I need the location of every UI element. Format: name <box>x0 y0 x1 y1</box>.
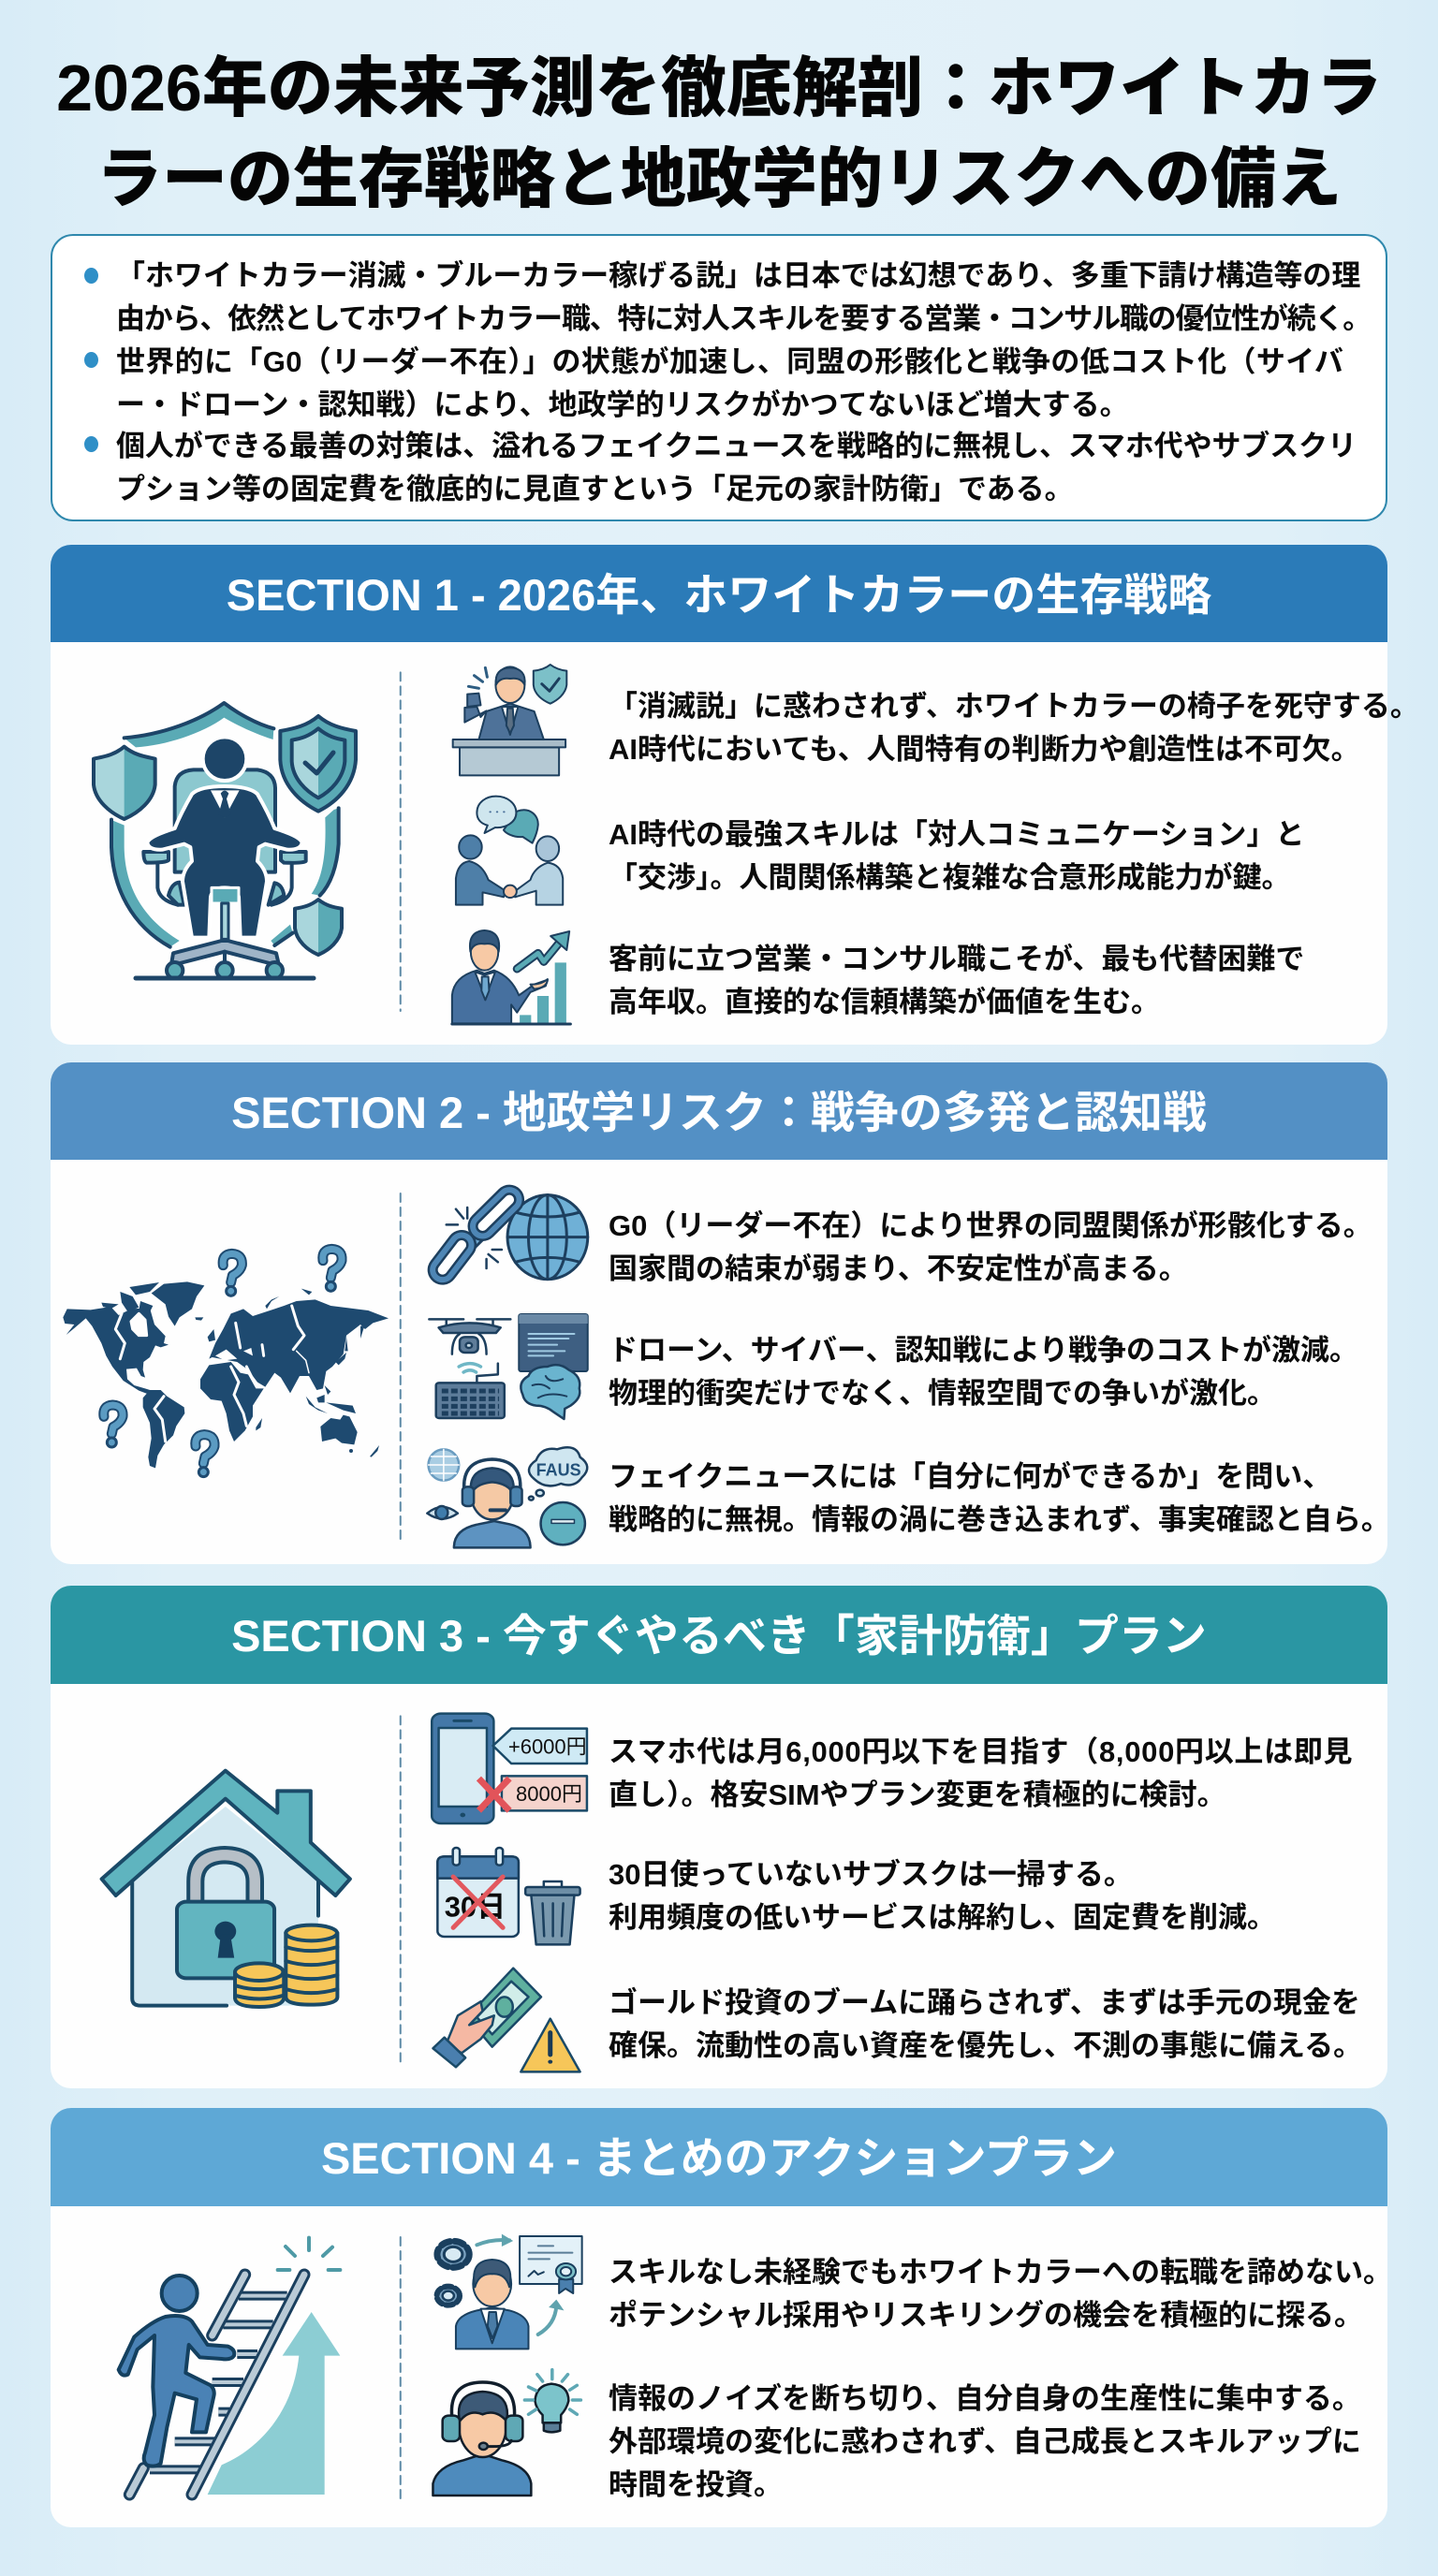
section 3 illustrations <box>99 1712 588 2073</box>
ladder <box>129 2275 304 2495</box>
section 2 text: G0: G0（リーダー不在）により世界の同盟関係が形骸化する。 <box>609 1209 1372 1242</box>
world map with question marks <box>63 1243 389 1479</box>
section 1 header <box>51 545 1387 642</box>
section 1 text: sales <box>609 943 1304 1018</box>
summary text 3: プション等の固定費を徹底的に見直すという「足元の家計防衛」である。 <box>116 473 1074 505</box>
icon: hand holding cash with warning sign <box>433 1969 580 2071</box>
question mark 3 <box>104 1405 123 1447</box>
icon: brain <box>521 1365 580 1419</box>
section 2 text: low cost war: 物理的衝突だけでなく、情報空間での争いが激化。 <box>609 1377 1276 1410</box>
section 1 text: skills: AI時代の最強スキルは「対人コミュニケーション」と <box>609 818 1304 851</box>
section 4 text: focus: 外部環境の変化に惑わされず、自己成長とスキルアップに <box>609 2425 1361 2458</box>
icon: house with padlock and coins <box>102 1771 350 2007</box>
section 3 text: smartphone: スマホ代は月6,000円以下を目指す（8,000円以上は即見 <box>609 1735 1353 1768</box>
icon: handshake with speech bubbles <box>456 797 563 905</box>
icon: smartphone with price tags <box>432 1714 587 1823</box>
summary text 1: 「ホワイトカラー消滅・ブルーカラー稼げる説」は日本では幻想であり、多重下請け構造等の理 <box>116 259 1360 292</box>
panel: section 1 <box>51 545 1387 1045</box>
section 3 text: subscriptions <box>609 1858 1276 1934</box>
summary text 2: 世界的に「G0（リーダー不在）」の状態が加速し、同盟の形骸化と戦争の低コスト化（サイバ <box>116 345 1343 378</box>
icon: calendar crossed out with trash can <box>437 1848 580 1944</box>
bullet 1 <box>84 268 98 284</box>
question mark 2 <box>323 1249 342 1291</box>
summary text 2: ー・ドローン・認知戦）により、地政学的リスクがかつてないほど増大する。 <box>116 388 1129 421</box>
section 4 text: career change: ポテンシャル採用やリスキリングの機会を積極的に探る。 <box>609 2299 1363 2332</box>
section 1 text: chair: AI時代においても、人間特有の判断力や創造性は不可欠。 <box>609 733 1360 766</box>
title <box>56 51 1382 215</box>
map cracks and seas <box>115 1306 309 1442</box>
section 2 text: fake news: 戦略的に無視。情報の渦に巻き込まれず、事実確認と自ら。 <box>609 1503 1390 1536</box>
icon: smartphone with price tags: +6000円 <box>508 1734 587 1758</box>
section 1 text: sales: 高年収。直接的な信頼構築が価値を生む。 <box>609 986 1160 1018</box>
section 1 text: sales: 客前に立つ営業・コンサル職こそが、最も代替困難で <box>609 943 1304 975</box>
icon: person with headset ignoring fake news: FAUS <box>536 1461 581 1480</box>
title: 2026年の未来予測を徹底解剖：ホワイトカラ <box>56 51 1382 124</box>
icon: salesperson with growth chart <box>452 930 570 1024</box>
icon: code window <box>519 1314 588 1371</box>
summary text 3: 個人ができる最善の対策は、溢れるフェイクニュースを戦略的に無視し、スマホ代やサブスクリ <box>116 430 1357 462</box>
section 1 header: SECTION 1 - 2026年、ホワイトカラーの生存戦略 <box>227 570 1211 620</box>
section 2 text: G0 <box>609 1209 1372 1285</box>
section 3 text: smartphone: 直し）。格安SIMやプラン変更を積極的に検討。 <box>609 1778 1226 1811</box>
section 2 icons <box>399 1185 590 1549</box>
section 2 text: fake news <box>609 1460 1390 1536</box>
illustration: climbing a ladder with rising arrow <box>116 2235 343 2501</box>
section 2 text: low cost war <box>609 1334 1358 1410</box>
section 3 text: smartphone <box>609 1735 1353 1811</box>
section 2 header: SECTION 2 - 地政学リスク：戦争の多発と認知戦 <box>231 1088 1207 1137</box>
icon: smartphone with price tags: 8000円 <box>516 1782 582 1806</box>
icon: person in chair protected by shields <box>92 701 358 981</box>
panel: section 2 <box>51 1062 1387 1564</box>
bullet 2 <box>84 352 98 368</box>
section 1 text: chair <box>609 690 1419 766</box>
climbing figure <box>119 2276 234 2466</box>
section 4 header <box>51 2108 1387 2206</box>
section 3 text: gold: 確保。流動性の高い資産を優先し、不測の事態に備える。 <box>609 2029 1362 2062</box>
panel: section 4 <box>51 2108 1387 2527</box>
arrow rising <box>208 2312 340 2495</box>
section 4 text: focus: 情報のノイズを断ち切り、自分自身の生産性に集中する。 <box>609 2382 1361 2415</box>
section 3 text: subscriptions: 利用頻度の低いサービスは解約し、固定費を削減。 <box>609 1901 1276 1934</box>
icon: person with headset ignoring fake news <box>427 1447 587 1547</box>
section 3 header: SECTION 3 - 今すぐやるべき「家計防衛」プラン <box>231 1611 1207 1661</box>
icon: drone <box>429 1319 510 1354</box>
summary text 2 <box>116 345 1343 421</box>
icon: businessman with gears and certificate <box>437 2234 582 2349</box>
icon: person with headset and light bulb <box>433 2370 580 2496</box>
section 3 header <box>51 1586 1387 1684</box>
section 2 text: fake news: フェイクニュースには「自分に何ができるか」を問い、 <box>609 1460 1331 1493</box>
section 3 text: subscriptions: 30日使っていないサブスクは一掃する。 <box>609 1858 1133 1891</box>
section 1 text: skills <box>609 818 1304 894</box>
icon: calendar crossed out with trash can: 30日 <box>445 1890 506 1923</box>
section 1 text: skills: 「交渉」。人間関係構築と複雑な合意形成能力が鍵。 <box>609 861 1290 894</box>
section 3 text: gold: ゴールド投資のブームに踊らされず、まずは手元の現金を <box>609 1986 1360 2019</box>
section 2 text: low cost war: ドローン、サイバー、認知戦により戦争のコストが激減。 <box>609 1334 1358 1367</box>
panel: summary <box>51 234 1387 521</box>
summary text 1 <box>116 259 1371 335</box>
icon: keyboard and wifi <box>436 1364 505 1418</box>
section 4 icons <box>399 2233 583 2499</box>
section 4 text: focus <box>609 2382 1361 2501</box>
section 1 text: chair: 「消滅説」に惑わされず、ホワイトカラーの椅子を死守する。 <box>609 690 1419 723</box>
summary text 3 <box>116 430 1357 505</box>
icon: broken chain and globe <box>443 1195 588 1280</box>
icon: businessman at desk with shield <box>453 665 566 775</box>
section 3 text: gold <box>609 1986 1362 2062</box>
bullet 3 <box>84 436 98 452</box>
section 2 text: G0: 国家間の結束が弱まり、不安定性が高まる。 <box>609 1252 1188 1285</box>
question mark 4 <box>196 1435 214 1477</box>
section 2 header <box>51 1062 1387 1160</box>
continents <box>63 1281 389 1468</box>
title: ラーの生存戦略と地政学的リスクへの備え <box>96 142 1342 215</box>
section 4 text: career change: スキルなし未経験でもホワイトカラーへの転職を諦めない。 <box>609 2256 1392 2289</box>
question mark 1 <box>223 1253 242 1295</box>
section 4 header: SECTION 4 - まとめのアクションプラン <box>321 2133 1117 2183</box>
section 4 text: focus: 時間を投資。 <box>609 2468 783 2501</box>
burst <box>278 2238 340 2270</box>
section 4 text: career change <box>609 2256 1392 2332</box>
summary text 1: 由から、依然としてホワイトカラー職、特に対人スキルを要する営業・コンサル職の優位性が続く。 <box>116 302 1371 335</box>
section 1 icons <box>399 664 572 1026</box>
panel: section 3 <box>51 1586 1387 2088</box>
